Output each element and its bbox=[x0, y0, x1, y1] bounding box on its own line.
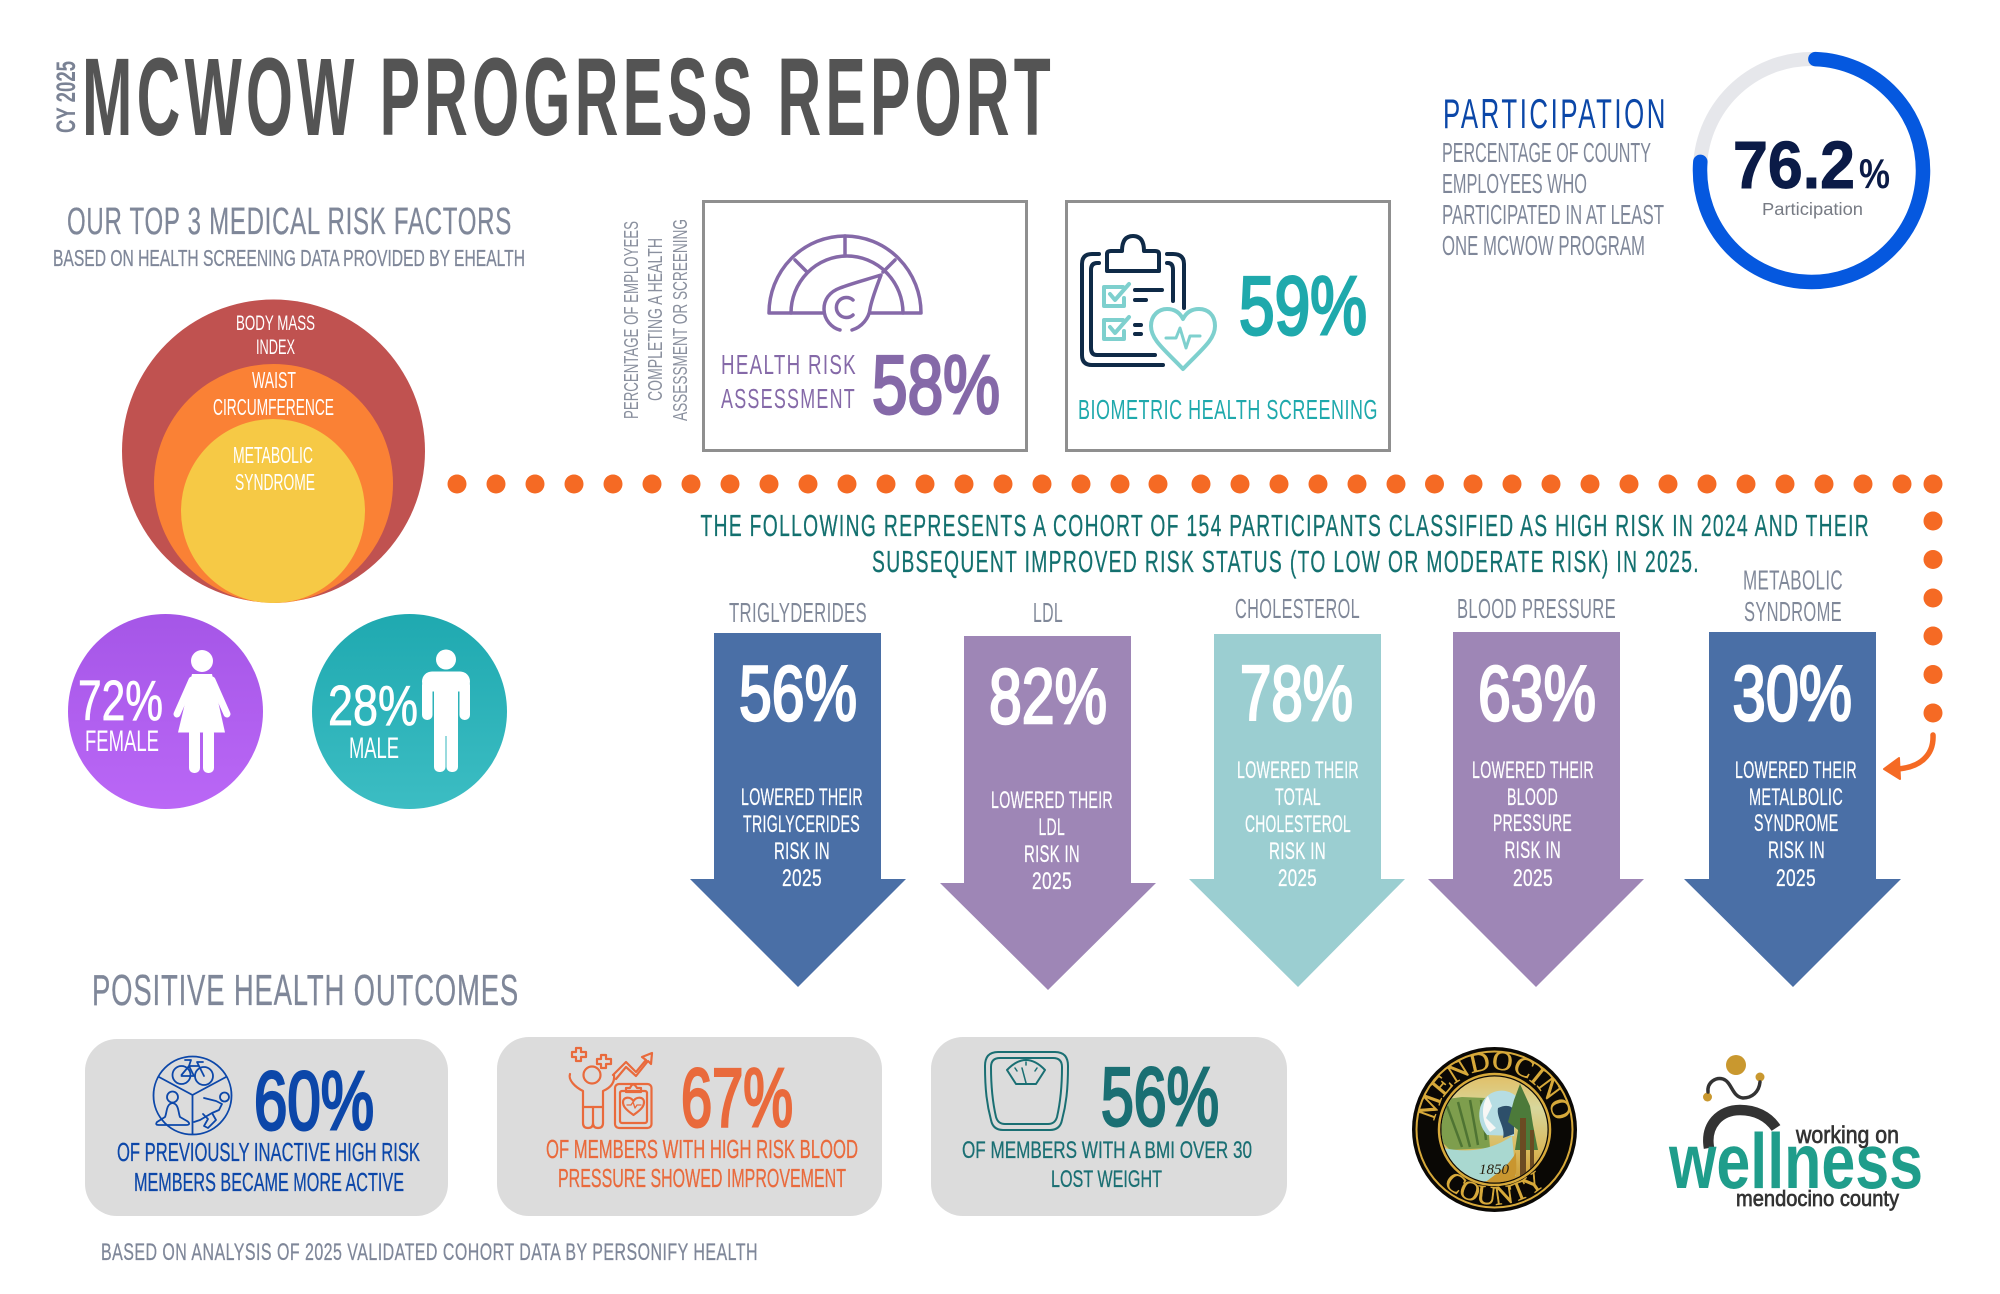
description: METALBOLIC bbox=[1749, 784, 1843, 811]
label: waist circumference: WAIST bbox=[252, 367, 296, 393]
rotated note: percentage of employees: ASSESSMENT OR SCREENING bbox=[670, 219, 692, 421]
description: RISK IN bbox=[1768, 837, 1825, 864]
rotated note: percentage of employees: COMPLETING A HEALTH bbox=[645, 238, 667, 401]
label: body mass index: INDEX bbox=[256, 335, 295, 359]
icon: gauge bbox=[769, 236, 921, 330]
description: BLOOD bbox=[1507, 784, 1558, 811]
description: PERCENTAGE OF COUNTY bbox=[1442, 137, 1651, 168]
label: metabolic syndrome: SYNDROME bbox=[235, 469, 315, 495]
heading: risk factors: OUR TOP 3 MEDICAL RISK FACTORS bbox=[67, 201, 512, 243]
label: health risk assessment: HEALTH RISK bbox=[721, 349, 857, 380]
label: ldl: LDL bbox=[1033, 597, 1063, 628]
description bbox=[741, 784, 863, 892]
value: 82%: 82% bbox=[989, 652, 1107, 740]
panel: activity outcome bbox=[85, 1039, 448, 1216]
icon: clipboard with heart bbox=[1082, 236, 1215, 369]
arrow card: cholesterol bbox=[1189, 593, 1405, 987]
panel: biometric health screening bbox=[1066, 202, 1390, 450]
label: body mass index bbox=[236, 311, 315, 359]
value: 67%: 67% bbox=[681, 1051, 793, 1144]
label: metabolic syndrome: METABOLIC bbox=[233, 442, 313, 468]
seal picture: 1850 bbox=[1479, 1162, 1510, 1178]
label: waist circumference: CIRCUMFERENCE bbox=[213, 394, 334, 420]
label: metabolic syndrome: SYNDROME bbox=[1744, 596, 1842, 627]
chart: participation ring bbox=[1696, 55, 1927, 286]
description bbox=[117, 1139, 420, 1197]
label: metabolic syndrome: METABOLIC bbox=[1743, 564, 1843, 596]
description: CHOLESTEROL bbox=[1245, 811, 1351, 838]
value: 59%: 59% bbox=[1239, 259, 1367, 352]
seal text: COUNTY bbox=[1446, 1170, 1542, 1206]
arrow card: metabolic syndrome bbox=[1684, 564, 1901, 987]
description bbox=[546, 1136, 858, 1193]
subheading: data source: BASED ON HEALTH SCREENING DATA PROVIDED BY EHEALTH bbox=[53, 245, 525, 271]
logo: working on wellness: working on bbox=[1795, 1122, 1899, 1149]
description: TOTAL bbox=[1275, 784, 1321, 811]
description: PRESSURE SHOWED IMPROVEMENT bbox=[558, 1165, 846, 1193]
label: health risk assessment: ASSESSMENT bbox=[721, 383, 856, 414]
description: 2025 bbox=[1278, 865, 1317, 892]
description: OF MEMBERS WITH A BMI OVER 30 bbox=[962, 1137, 1252, 1164]
description: ONE MCWOW PROGRAM bbox=[1442, 230, 1645, 261]
label: blood pressure: BLOOD PRESSURE bbox=[1457, 593, 1616, 624]
seal text: MENDOCINO bbox=[1417, 1052, 1570, 1121]
description: RISK IN bbox=[1504, 837, 1561, 864]
value: 63%: 63% bbox=[1478, 649, 1596, 737]
description: 2025 bbox=[782, 865, 822, 892]
description bbox=[1472, 757, 1594, 892]
label: waist circumference bbox=[213, 367, 334, 420]
arrow: curved orange pointer bbox=[1884, 735, 1933, 779]
label: biometric health screening: BIOMETRIC HEALTH SCREENING bbox=[1078, 394, 1378, 425]
arrow card: blood pressure bbox=[1428, 593, 1644, 987]
value: 78%: 78% bbox=[1240, 649, 1353, 737]
rotated note: percentage of employees bbox=[621, 219, 692, 421]
description bbox=[1237, 757, 1359, 892]
icon: male figure bbox=[422, 650, 470, 772]
description: PARTICIPATED IN AT LEAST bbox=[1442, 199, 1664, 230]
rotated note: percentage of employees: PERCENTAGE OF EMPLOYEES bbox=[621, 221, 643, 419]
description: LDL bbox=[1038, 814, 1065, 841]
stat: male share bbox=[312, 614, 507, 809]
footnote: BASED ON ANALYSIS OF 2025 VALIDATED COHORT DATA BY PERSONIFY HEALTH bbox=[101, 1239, 758, 1266]
value: 56%: 56% bbox=[739, 649, 857, 737]
seal text bbox=[1417, 1052, 1570, 1206]
nested circles diagram bbox=[122, 300, 425, 603]
date label: CY 2025: CY 2025 bbox=[51, 61, 81, 133]
description: RISK IN bbox=[774, 838, 830, 865]
panel: weight outcome bbox=[931, 1037, 1287, 1216]
stat: male share: MALE bbox=[349, 732, 399, 765]
label: participation: Participation bbox=[1762, 199, 1863, 219]
value: 76.2%: 76.2 bbox=[1733, 128, 1855, 203]
description bbox=[991, 787, 1113, 895]
cohort description bbox=[700, 508, 1870, 579]
description: OF MEMBERS WITH HIGH RISK BLOOD bbox=[546, 1136, 858, 1164]
description: LOWERED THEIR bbox=[741, 784, 863, 811]
description: LOWERED THEIR bbox=[991, 787, 1113, 814]
label: metabolic syndrome bbox=[1743, 564, 1843, 627]
description: EMPLOYEES WHO bbox=[1442, 168, 1587, 199]
description bbox=[962, 1137, 1252, 1193]
description: RISK IN bbox=[1269, 838, 1326, 865]
description: LOST WEIGHT bbox=[1051, 1166, 1162, 1193]
heading: participation: PARTICIPATION bbox=[1443, 90, 1668, 137]
description: 2025 bbox=[1776, 865, 1816, 892]
panel: blood pressure outcome bbox=[497, 1037, 882, 1216]
stat: male share: 28% bbox=[328, 674, 418, 738]
icon: bathroom scale bbox=[985, 1052, 1068, 1130]
value: 58%: 58% bbox=[872, 338, 1000, 431]
arrow card: ldl bbox=[940, 597, 1156, 990]
label: metabolic syndrome bbox=[233, 442, 315, 495]
description: RISK IN bbox=[1024, 841, 1080, 868]
icon: person with clipboard and trend bbox=[570, 1048, 652, 1128]
chart: participation ring: % bbox=[1859, 150, 1890, 197]
section: top 3 medical risk factors bbox=[53, 201, 525, 603]
description: OF PREVIOUSLY INACTIVE HIGH RISK bbox=[117, 1139, 420, 1167]
seal picture bbox=[1440, 1075, 1550, 1186]
section: participation text bbox=[1442, 90, 1668, 261]
description: 2025 bbox=[1032, 868, 1072, 895]
title: MCWOW PROGRESS REPORT bbox=[82, 36, 1055, 159]
label: cholesterol: CHOLESTEROL bbox=[1235, 593, 1360, 624]
stat: female share: 72% bbox=[78, 669, 163, 733]
heading: positive health outcomes: POSITIVE HEALTH OUTCOMES bbox=[92, 966, 519, 1015]
description bbox=[1735, 757, 1857, 892]
logo: working on wellness: wellness bbox=[1668, 1117, 1923, 1205]
stat: female share bbox=[68, 614, 263, 809]
label: health risk assessment bbox=[721, 349, 857, 414]
value: 60%: 60% bbox=[254, 1054, 374, 1147]
description: TRIGLYCERIDES bbox=[743, 811, 860, 838]
description: MEMBERS BECAME MORE ACTIVE bbox=[134, 1169, 404, 1197]
icon: female figure bbox=[177, 650, 227, 773]
panel: health risk assessment bbox=[704, 202, 1026, 450]
logo: working on wellness bbox=[1668, 1055, 1923, 1211]
stat: female share: FEMALE bbox=[85, 725, 159, 758]
description: LOWERED THEIR bbox=[1735, 757, 1857, 784]
value: 56%: 56% bbox=[1101, 1050, 1219, 1143]
arrow card: triglycerides bbox=[690, 597, 906, 987]
icon: activity wheel bbox=[154, 1056, 232, 1134]
logo: Mendocino County seal bbox=[1412, 1047, 1577, 1212]
logo: working on wellness: mendocino county bbox=[1736, 1186, 1899, 1211]
label: body mass index: BODY MASS bbox=[236, 311, 315, 335]
description: PRESSURE bbox=[1493, 810, 1572, 837]
description: 2025 bbox=[1513, 865, 1553, 892]
description: LOWERED THEIR bbox=[1237, 757, 1359, 784]
description bbox=[1442, 137, 1664, 261]
dotted connector bbox=[448, 474, 1942, 722]
description: SYNDROME bbox=[1754, 810, 1838, 837]
value: 30%: 30% bbox=[1732, 649, 1852, 737]
label: triglyderides: TRIGLYDERIDES bbox=[729, 597, 867, 628]
description: LOWERED THEIR bbox=[1472, 757, 1594, 784]
